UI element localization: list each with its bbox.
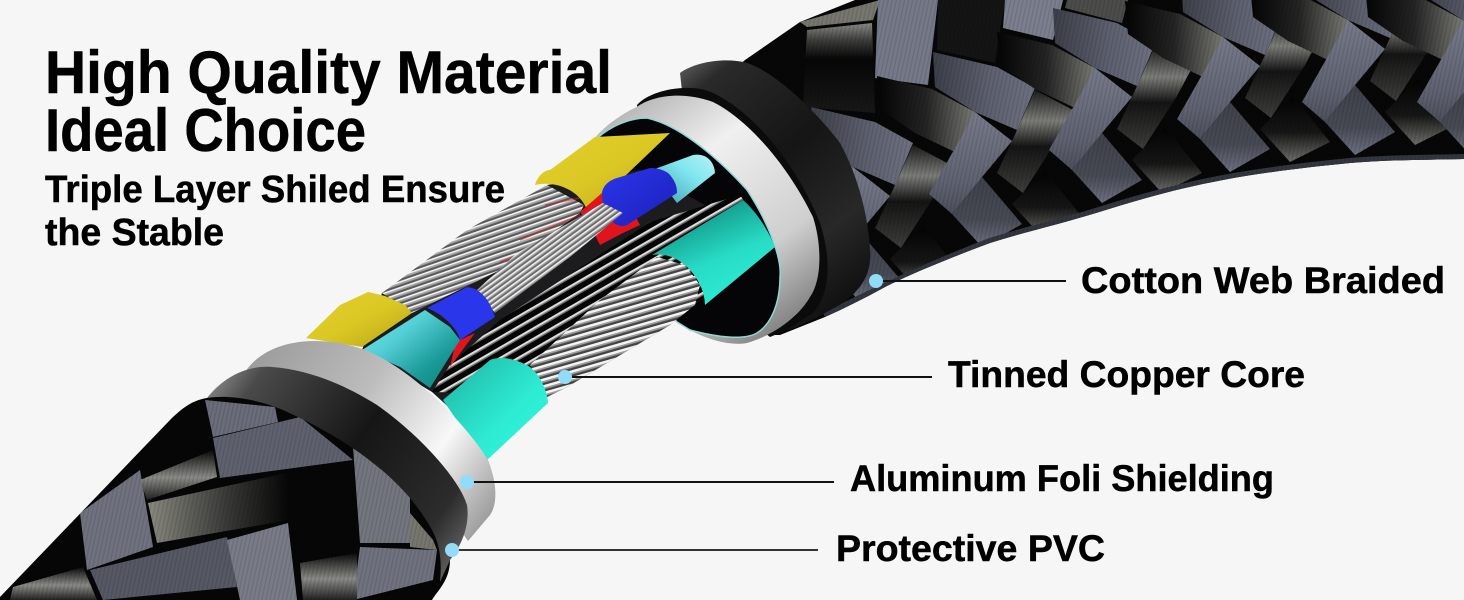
blue conductor strands bbox=[477, 203, 623, 313]
callout: protective pvc: Protective PVC bbox=[836, 528, 1105, 569]
lower green sleeve bbox=[443, 358, 548, 462]
upper braided cable bbox=[700, 0, 1464, 340]
upper thin black ring bbox=[637, 88, 828, 337]
subtitle line 2: the Stable bbox=[45, 212, 224, 254]
upper blue sleeve bbox=[602, 168, 677, 226]
callout: cotton web braided: Cotton Web Braided bbox=[1081, 260, 1445, 301]
upper aluminum ring bbox=[593, 96, 819, 344]
upper cyan conductor bbox=[652, 155, 715, 203]
upper black sleeve ring bbox=[680, 60, 870, 335]
lower black sleeve ring bbox=[207, 367, 468, 582]
wire: green pair bbox=[443, 200, 775, 462]
lower braided cable bbox=[0, 390, 455, 600]
callout: aluminum foil shielding bbox=[460, 458, 1274, 499]
lower aluminum ring bbox=[245, 341, 495, 541]
subtitle line 1: Triple Layer Shiled Ensure bbox=[45, 169, 505, 211]
wire: yellow pair bbox=[306, 133, 670, 347]
lower blue sleeve bbox=[427, 287, 495, 340]
callout: protective pvc bbox=[445, 528, 1105, 569]
lower yellow sleeve bbox=[306, 292, 412, 347]
callout: tinned copper core: Tinned Copper Core bbox=[948, 354, 1305, 395]
title bbox=[45, 39, 612, 254]
red conductor bbox=[580, 180, 640, 245]
green conductor strands bbox=[530, 257, 700, 397]
yellow conductor strands bbox=[382, 185, 584, 313]
wire bundle bbox=[432, 195, 770, 395]
heading line 1: High Quality Material bbox=[45, 39, 612, 106]
red fibres bbox=[500, 198, 580, 262]
lower red sleeve bbox=[450, 333, 475, 367]
dark wire core bbox=[362, 170, 770, 440]
callout: cotton web braided bbox=[869, 260, 1445, 301]
cable opening bbox=[593, 118, 780, 337]
lower cyan conductor bbox=[362, 310, 460, 388]
callout: tinned copper core bbox=[558, 354, 1305, 395]
heading line 2: Ideal Choice bbox=[45, 97, 366, 164]
wire: blue pair bbox=[362, 155, 715, 388]
upper green sleeve bbox=[652, 200, 775, 305]
callout: aluminum foil shielding: Aluminum Foli Shielding bbox=[850, 458, 1274, 499]
upper yellow sleeve bbox=[535, 133, 670, 210]
